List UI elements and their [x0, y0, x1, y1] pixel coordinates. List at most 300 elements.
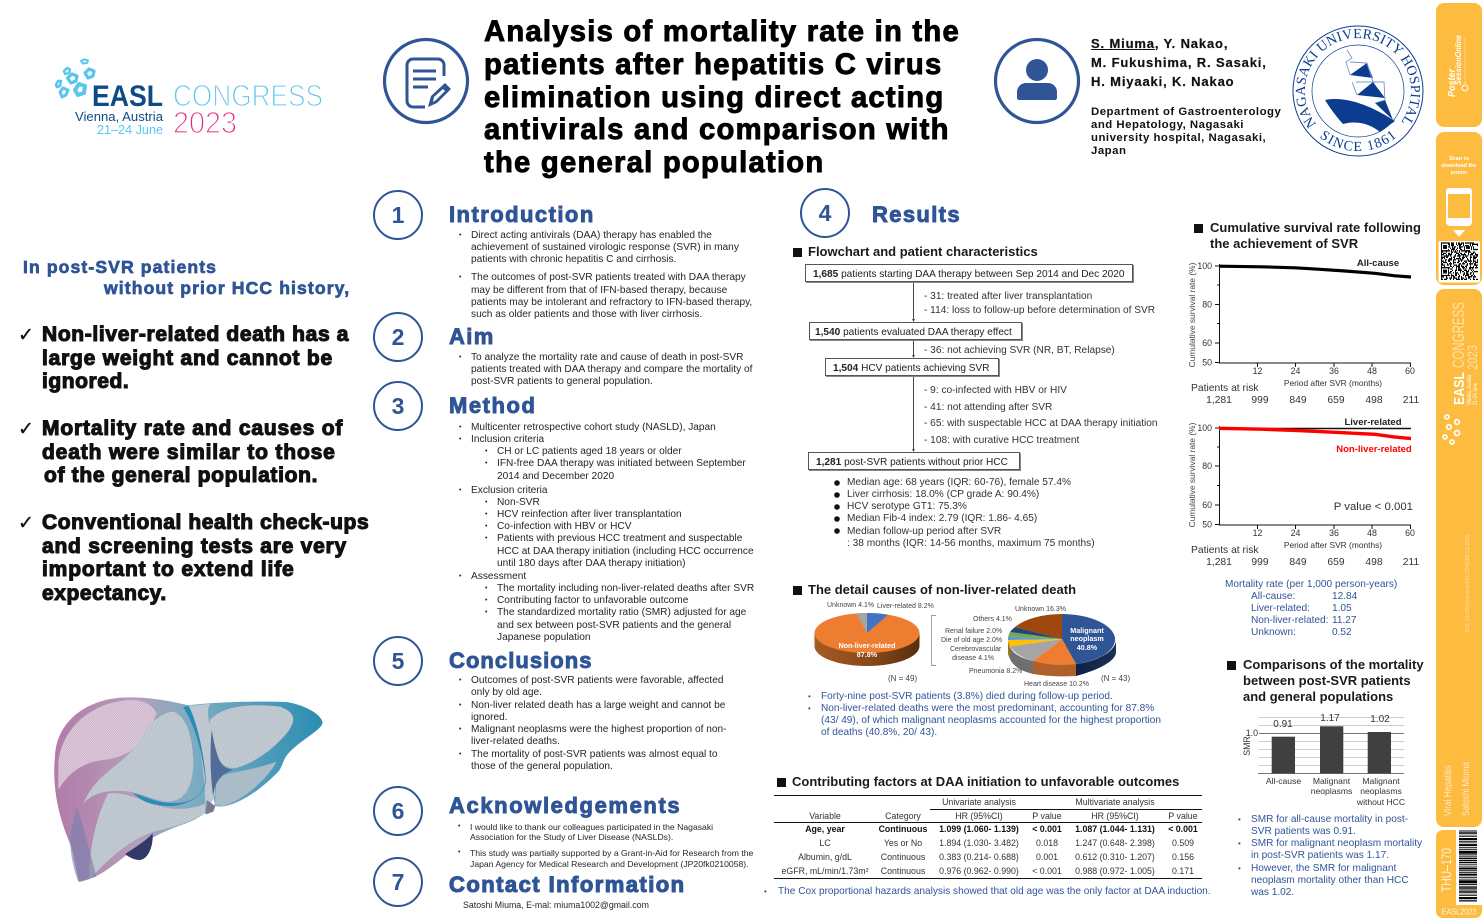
pie: all causes (N = 49): Non-liver-related [838, 641, 896, 650]
pie: non-liver-related causes (N = 43): Unknown 16.3% [1015, 606, 1066, 613]
pie: all causes (N = 49) [814, 602, 934, 683]
chart: all-cause survival: 12 [1253, 366, 1262, 376]
message 3: important to extend life [42, 558, 295, 581]
table: Cox analysis: LC [819, 838, 831, 848]
text: introduction: patients may be intolerant and refractory to IFN-based therapy, [471, 297, 752, 308]
sidebar [1436, 3, 1482, 918]
subheading: comparisons: Comparisons of the mortality [1243, 657, 1424, 672]
table: Cox analysis: Variable [809, 811, 841, 821]
pie: non-liver-related causes (N = 43): Others 4.1% [973, 616, 1012, 623]
chart: cause-specific survival: 60 [1202, 500, 1212, 510]
table: Cox analysis: P value [1032, 811, 1062, 821]
sidebar panel: abstract number and barcode [1436, 830, 1482, 918]
section number 4: 4 [819, 200, 831, 226]
chart: SMR bars: 1.0 [1246, 728, 1258, 738]
chart: cause-specific survival: 80 [1202, 461, 1212, 471]
chart: cause-specific survival [1187, 417, 1419, 568]
chart: SMR bars: 0.91 [1273, 719, 1293, 730]
sidebar panel: abstract number and barcode: EASL2023 [1442, 908, 1477, 916]
chart: all-cause survival: 36 [1329, 366, 1339, 376]
chart: cause-specific survival: Cumulative survival rate (%) [1187, 422, 1197, 527]
pie: non-liver-related causes (N = 43): Heart disease 10.2% [1024, 681, 1089, 688]
heading: Method: Method [449, 393, 537, 418]
section number 5 [373, 636, 423, 686]
text: SMR findings: However, the SMR for malignant [1251, 863, 1396, 874]
chart: cause-specific survival: 36 [1329, 528, 1339, 538]
subheading: detail causes: The detail causes of non-liver-related death [808, 582, 1076, 597]
text: pie findings: • [808, 704, 811, 713]
heading: Introduction: Introduction [449, 202, 595, 227]
chart: all-cause survival: All-cause [1357, 258, 1399, 269]
exclusions step 3: - 108: with curative HCC treatment [924, 435, 1079, 446]
table: Cox analysis: 0.509 [1172, 838, 1194, 848]
text: method: The standardized mortality ratio (SMR) adjusted for age [497, 607, 746, 618]
table: Cox analysis: P value [1168, 811, 1198, 821]
chart: cause-specific survival: 50 [1202, 520, 1212, 530]
affiliation [1091, 106, 1281, 157]
text: introduction [459, 230, 752, 320]
pie: all causes (N = 49): Unknown 4.1% [827, 602, 874, 609]
subheading: contributing factors: Contributing factors at DAA initiation to unfavorable outcomes [792, 774, 1179, 789]
text: Cox note: • [764, 887, 767, 896]
chart: all-cause survival: 60 [1405, 366, 1415, 376]
pie: non-liver-related causes (N = 43): 40.8% [1077, 643, 1098, 652]
chart: cause-specific survival: 211 [1403, 557, 1419, 568]
affiliation: university hospital, Nagasaki, [1091, 132, 1266, 144]
chart: cause-specific survival: Non-liver-related [1336, 444, 1412, 455]
patient characteristics: Liver cirrhosis: 18.0% (CP grade A: 90.4%) [847, 489, 1039, 500]
text: method: until 180 days after DAA therapy initiation) [497, 558, 686, 569]
text: SMR findings: SVR patients was 0.91. [1251, 826, 1356, 837]
bracket [932, 616, 936, 666]
text: aim: patients treated with DAA therapy and compare the mortality of [471, 364, 752, 375]
text: conclusions: Malignant neoplasms were the highest proportion of non- [471, 724, 727, 735]
title: the general population [484, 147, 824, 179]
pie: non-liver-related causes (N = 43): Die of old age 2.0% [941, 637, 1002, 644]
table: Cox analysis: HR (95%CI) [955, 811, 1003, 821]
chart: cause-specific survival: Patients at risk [1191, 545, 1259, 556]
text: contact: Satoshi Miuma, E-mal: miuma1002@gmail.com [463, 900, 649, 910]
text: pie findings: Non-liver-related deaths were the most predominant, accounting for 87.8% [821, 703, 1154, 714]
patient characteristics: Median age: 68 years (IQR: 60-76), female 57.4% [847, 477, 1071, 488]
message 1: ✓ [18, 324, 34, 346]
text: method: Non-SVR [497, 497, 540, 508]
table: Cox analysis: 1.894 (1.030- 3.482) [939, 838, 1019, 848]
text: SMR findings: neoplasm mortality other than HCC [1251, 875, 1409, 886]
chart: all-cause survival: 60 [1202, 338, 1212, 348]
pie: all causes (N = 49): (N = 49) [888, 674, 917, 683]
logo: Nagasaki University Hospital seal: SINCE 1861 [1320, 131, 1396, 151]
text: acknowledgements: This study was partially supported by a Grant-in-Aid for Research from the [470, 848, 753, 858]
pie: non-liver-related causes (N = 43): Renal failure 2.0% [945, 628, 1002, 635]
logo: EASL Congress 2023 [54, 58, 323, 140]
table: Cox analysis: 0.156 [1172, 852, 1194, 862]
text: pie findings: Forty-nine post-SVR patients (3.8%) died during follow-up period. [821, 691, 1113, 702]
table: Cox analysis: 1.099 (1.060- 1.139) [939, 824, 1019, 834]
chart: SMR bars: Malignant [1362, 776, 1400, 786]
title: Analysis of mortality rate in the [484, 16, 960, 48]
box: 1,281 [808, 452, 1020, 470]
chart: all-cause survival: Cumulative survival rate (%) [1187, 262, 1197, 367]
chart: all-cause survival: 1,281 [1206, 395, 1232, 406]
text: SMR findings: SMR for malignant neoplasm mortality [1251, 838, 1422, 849]
text: conclusions [459, 675, 727, 772]
text: SMR findings: • [1238, 839, 1241, 848]
text: method: Multicenter retrospective cohort study (NASLD), Japan [471, 422, 716, 433]
chart: all-cause survival: 48 [1367, 366, 1377, 376]
chart: cause-specific survival: 849 [1289, 557, 1307, 568]
chart: cause-specific survival: 1,281 [1206, 557, 1232, 568]
chart: all-cause survival: 50 [1202, 358, 1212, 368]
chart: SMR bars: 1.02 [1370, 714, 1390, 725]
sidebar panel: congress info: Vienna, Austria [1467, 375, 1473, 405]
section number 2 [373, 312, 423, 362]
text: conclusions: Outcomes of post-SVR patients were favorable, affected [471, 675, 724, 686]
sidebar panel: congress info: EASL [1451, 372, 1468, 405]
heading: Results: Results [872, 202, 961, 227]
text: acknowledgements: I would like to thank our colleagues participated in the Nagasaki [470, 822, 713, 832]
text: method: Japanese population [497, 632, 590, 643]
table: Cox analysis: 1.087 (1.044- 1.131) [1075, 824, 1155, 834]
authors [1091, 36, 1267, 89]
message 2 [18, 417, 343, 487]
text: mortality rates: Non-liver-related: [1251, 615, 1328, 626]
sidebar panel: QR code: download the [1441, 163, 1477, 169]
pie: non-liver-related causes (N = 43): disease 4.1% [952, 655, 994, 662]
text: method: IFN-free DAA therapy was initiated between September [497, 458, 746, 469]
text: introduction: such as older patients and those with liver cirrhosis. [471, 309, 702, 320]
chart: SMR bars: neoplasms [1360, 786, 1402, 796]
table: Cox analysis: 0.001 [1036, 852, 1058, 862]
exclusions step 3: - 9: co-infected with HBV or HIV [924, 385, 1067, 396]
text: acknowledgements [458, 822, 753, 869]
message 1: large weight and cannot be [42, 347, 333, 370]
chart: all-cause survival: Period after SVR (months) [1284, 378, 1382, 388]
message 3 [18, 511, 369, 605]
message 3: ✓ [18, 512, 34, 534]
title: patients after hepatitis C virus [484, 49, 942, 81]
chart: cause-specific survival: 659 [1327, 557, 1345, 568]
text: introduction: achievement of sustained virologic response (SVR) in many [471, 242, 739, 253]
panel: left key messages [18, 257, 369, 605]
table: Cox analysis: 0.612 (0.310- 1.207) [1075, 852, 1155, 862]
logo: EASL Congress 2023: 21–24 June [97, 123, 163, 137]
message 3: expectancy. [42, 582, 167, 605]
sidebar panel: congress info: CONGRESS [1450, 302, 1468, 368]
text: mortality rates: 0.52 [1332, 627, 1352, 638]
logo: EASL Congress 2023: EASL [92, 80, 163, 113]
heading: Conclusions: Conclusions [449, 648, 593, 673]
chart: cause-specific survival: 12 [1253, 528, 1262, 538]
text: mortality rates [1225, 579, 1397, 638]
message 1: Non-liver-related death has a [42, 323, 349, 346]
chart: all-cause survival: Patients at risk [1191, 383, 1259, 394]
chart: all-cause survival: 498 [1365, 395, 1383, 406]
text: Cox note: The Cox proportional hazards analysis showed that old age was the only factor at DAA induction. [778, 886, 1211, 897]
text: method [459, 422, 754, 643]
sidebar panel: congress info: 2023 [1464, 345, 1480, 370]
sidebar panel: Poster Session Online: Poster [1447, 68, 1458, 97]
icon: person [994, 38, 1080, 124]
box: 1,540 [809, 322, 1022, 340]
lead-in statement: without prior HCC history, [104, 278, 350, 298]
affiliation: and Hepatology, Nagasaki [1091, 119, 1244, 131]
text: introduction: may be different from that of IFN-based therapy, because [471, 285, 727, 296]
exclusions step 1: - 114: loss to follow-up before determination of SVR [924, 305, 1155, 316]
table: Cox analysis: HR (95%CI) [1091, 811, 1139, 821]
section number 2: 2 [392, 324, 404, 350]
text: method: Co-infection with HBV or HCV [497, 521, 631, 532]
table: Cox analysis: < 0.001 [1032, 824, 1062, 834]
box: 1,685 [805, 264, 1133, 282]
lead-in statement: In post-SVR patients [23, 257, 217, 277]
table: Cox analysis: 1.247 (0.648- 2.398) [1075, 838, 1155, 848]
pie: non-liver-related causes (N = 43): Malignant [1070, 626, 1104, 635]
affiliation: Japan [1091, 145, 1126, 157]
table: Cox analysis [774, 795, 1202, 879]
text: pie findings [808, 691, 1161, 738]
subheading: comparisons: and general populations [1243, 689, 1393, 704]
message 3: and screening tests are very [42, 535, 347, 558]
subheading: cumulative survival [1194, 220, 1421, 251]
authors: S. Miuma, Y. Nakao, [1091, 36, 1228, 51]
box: 1,540: 1,540 patients evaluated DAA therapy effect [815, 327, 1012, 338]
pie: all causes (N = 49): Liver-related 8.2% [877, 603, 934, 610]
text: mortality rates: 11.27 [1332, 615, 1357, 626]
section number 7: 7 [392, 869, 404, 895]
text: method: Assessment [471, 571, 526, 582]
patient characteristics: HCV serotype GT1: 75.3% [847, 501, 967, 512]
sidebar panel: congress info: Satoshi Miuma [1460, 762, 1472, 816]
title: elimination using direct acting [484, 82, 944, 114]
chart: cause-specific survival: Period after SVR (months) [1284, 540, 1382, 550]
text: introduction: patients with chronic hepatitis C and cirrhosis. [471, 254, 676, 265]
text: introduction: Direct acting antivirals (DAA) therapy has enabled the [471, 230, 712, 241]
box: 1,504: 1,504 HCV patients achieving SVR [833, 363, 990, 374]
text: conclusions: liver-related deaths. [471, 736, 560, 747]
chart: SMR bars [1242, 713, 1405, 807]
box: 1,281: 1,281 post-SVR patients without prior HCC [816, 457, 1008, 468]
section number 4 [800, 188, 850, 238]
sidebar panel: congress info: Viral Hepatitis [1442, 765, 1454, 816]
message 1: ignored. [42, 370, 129, 393]
chart: all-cause survival: 849 [1289, 395, 1307, 406]
chart: SMR bars: Malignant [1313, 776, 1351, 786]
text: aim: post-SVR patients to general population. [471, 376, 653, 387]
text: aim [459, 352, 752, 387]
box: 1,685: 1,685 patients starting DAA therapy between Sep 2014 and Dec 2020 [813, 269, 1124, 280]
sidebar panel: congress info: 21–24 June [1473, 383, 1479, 405]
chart: all-cause survival: 24 [1291, 366, 1300, 376]
message 1 [18, 323, 350, 393]
table: Cox analysis: Continuous [879, 824, 928, 834]
heading: Acknowledgements: Acknowledgements [449, 793, 681, 818]
chart: cause-specific survival: Liver-related [1344, 417, 1402, 428]
exclusions step 1 [924, 291, 1155, 316]
text: mortality rates: 1.05 [1332, 603, 1352, 614]
text: SMR findings: in post-SVR patients was 1.17. [1251, 850, 1389, 861]
chart: SMR bars: 1.17 [1320, 713, 1340, 724]
chart: SMR bars: All-cause [1266, 776, 1301, 786]
sidebar panel: Poster Session Online [1436, 3, 1482, 127]
pie charts [814, 602, 1130, 688]
text: method: Inclusion criteria [471, 434, 544, 445]
table: Cox analysis: 0.383 (0.214- 0.688) [939, 852, 1019, 862]
text: SMR findings: was 1.02. [1251, 887, 1294, 898]
table: Cox analysis: < 0.001 [1168, 824, 1198, 834]
icon: document with pencil [382, 38, 470, 124]
sidebar panel: congress info [1436, 289, 1482, 827]
sidebar panel: congress info: DOI: 10.3252/pro.eu.EASLCONGRESS.2023 [1465, 535, 1471, 632]
table: Cox analysis: Albumin, g/dL [798, 852, 852, 862]
text: method: CH or LC patients aged 18 years or older [497, 446, 682, 457]
table: Cox analysis: Continuous [881, 866, 926, 876]
text: aim: To analyze the mortality rate and cause of death in post-SVR [471, 352, 743, 363]
text: conclusions: only by old age. [471, 687, 542, 698]
chart: all-cause survival: 999 [1251, 395, 1269, 406]
message 2: Mortality rate and causes of [42, 417, 343, 440]
text: method: Patients with previous HCC treatment and suspectable [497, 533, 742, 544]
text: method: and sex between post-SVR patients and the general [497, 620, 731, 630]
table: Cox analysis: eGFR, mL/min/1.73m² [781, 866, 869, 876]
sidebar panel: QR code: poster [1451, 170, 1468, 176]
text: method: 2014 and December 2020 [497, 471, 614, 482]
chart: all-cause survival [1187, 258, 1419, 406]
chart: cause-specific survival: 999 [1251, 557, 1269, 568]
exclusions step 3: - 41: not attending after SVR [924, 402, 1052, 413]
subheading: comparisons: between post-SVR patients [1243, 673, 1411, 688]
chart: all-cause survival: 659 [1327, 395, 1345, 406]
text: method: HCV reinfection after liver transplantation [497, 509, 682, 520]
table: Cox analysis: 0.018 [1036, 838, 1058, 848]
subheading: cumulative survival: the achievement of SVR [1210, 236, 1358, 251]
section number 3 [373, 381, 423, 431]
heading: Contact Information: Contact Information [449, 872, 686, 897]
illustration: liver [54, 697, 323, 882]
text: conclusions: Non-liver related death has a large weight and cannot be [471, 700, 725, 711]
sidebar panel: QR code [1436, 132, 1482, 285]
chart: cause-specific survival: 24 [1291, 528, 1300, 538]
text: conclusions: those of the general population. [471, 761, 613, 772]
chart: cause-specific survival: 48 [1367, 528, 1377, 538]
subheading: comparisons [1227, 657, 1424, 704]
table: Cox analysis: Univariate analysis [942, 797, 1017, 807]
section number 6: 6 [392, 798, 404, 824]
text: SMR findings [1238, 814, 1422, 898]
chart: all-cause survival: 100 [1197, 261, 1212, 271]
table: Cox analysis: 0.171 [1172, 866, 1194, 876]
text: mortality rates: Liver-related: [1251, 603, 1310, 614]
lead-in statement [23, 257, 350, 298]
pie: non-liver-related causes (N = 43): Cerebrovascular [950, 646, 1002, 653]
chart: cause-specific survival: 498 [1365, 557, 1383, 568]
affiliation: Department of Gastroenterology [1091, 106, 1281, 118]
text: conclusions: ignored. [471, 712, 508, 723]
chart: cause-specific survival: 100 [1197, 423, 1212, 433]
pie: non-liver-related causes (N = 43): Pneumonia 8.2% [969, 668, 1022, 675]
text: method: Exclusion criteria [471, 485, 548, 496]
sidebar panel: abstract number and barcode: THU–170 [1439, 848, 1454, 892]
exclusions step 1: - 31: treated after liver transplantation [924, 291, 1092, 302]
message 2: ✓ [18, 418, 34, 440]
authors: M. Fukushima, R. Sasaki, [1091, 55, 1267, 70]
text: mortality rates: All-cause: [1251, 591, 1295, 602]
section number 6 [373, 786, 423, 836]
table: Cox analysis: < 0.001 [1032, 866, 1062, 876]
logo: Nagasaki University Hospital seal: NAGASAKI UNIVERSITY HOSPITAL [1296, 28, 1420, 129]
exclusions step 2: - 36: not achieving SVR (NR, BT, Relapse) [924, 345, 1115, 356]
chart: cause-specific survival: 60 [1405, 528, 1415, 538]
pie: all causes (N = 49): 87.8% [857, 650, 878, 659]
text: method: The mortality including non-liver-related deaths after SVR [497, 583, 754, 594]
patient characteristics: Median Fib-4 index: 2.79 (IQR: 1.86- 4.65) [847, 513, 1037, 524]
text: SMR findings: • [1238, 864, 1241, 873]
patient characteristics: Median follow-up period after SVR [847, 526, 1001, 537]
table: Cox analysis: Yes or No [884, 838, 922, 848]
flowchart [805, 264, 1158, 471]
pie: non-liver-related causes (N = 43): (N = 43) [1101, 674, 1130, 683]
logo: EASL Congress 2023: 2023 [173, 105, 237, 140]
table: Cox analysis: Category [885, 811, 921, 821]
text: method: HCC at DAA therapy initiation (including HCC occurrence [497, 546, 754, 557]
text: acknowledgements: Association for the Study of Liver Disease (NASLDs). [470, 832, 673, 842]
chart: SMR bars: without HCC [1356, 797, 1405, 807]
pie: non-liver-related causes (N = 43): neoplasm [1070, 634, 1104, 643]
section number 1 [373, 190, 423, 240]
authors: H. Miyaaki, K. Nakao [1091, 74, 1234, 89]
chart: cause-specific survival: P value < 0.001 [1334, 501, 1413, 513]
table: Cox analysis: Age, year [805, 824, 845, 834]
text: pie findings: of deaths (40.8%, 20/ 43). [821, 727, 937, 738]
text: mortality rates: Unknown: [1251, 627, 1296, 638]
box: 1,504 [825, 358, 999, 376]
message 2: death were similar to those [42, 441, 336, 464]
sidebar panel: Poster Session Online: SessionOnline [1453, 35, 1463, 85]
chart: all-cause survival: 80 [1202, 300, 1212, 310]
section number 5: 5 [392, 648, 404, 674]
table: Cox analysis: Multivariate analysis [1075, 797, 1155, 807]
heading: Aim: Aim [449, 324, 495, 349]
title: antivirals and comparison with [484, 114, 950, 146]
message 2: of the general population. [44, 464, 318, 487]
chart: all-cause survival: 211 [1403, 395, 1419, 406]
pie: non-liver-related causes (N = 43) [941, 606, 1130, 688]
subheading: flowchart: Flowchart and patient characteristics [808, 244, 1038, 259]
text: mortality rates: 12.84 [1332, 591, 1357, 602]
text: SMR findings: • [1238, 815, 1241, 824]
chart: SMR bars: SMR [1242, 736, 1252, 756]
table: Cox analysis: 0.988 (0.972- 1.005) [1075, 866, 1155, 876]
section number 3: 3 [392, 393, 404, 419]
title [484, 16, 960, 179]
text: mortality rates: Mortality rate (per 1,000 person-years) [1225, 579, 1397, 590]
patient characteristics [834, 477, 1095, 549]
subheading: cumulative survival: Cumulative survival rate following [1210, 220, 1421, 235]
text: introduction: The outcomes of post-SVR patients treated with DAA therapy [471, 272, 746, 283]
logo: EASL Congress 2023: Vienna, Austria [75, 110, 163, 124]
section number 1: 1 [392, 202, 404, 228]
text: method: Contributing factor to unfavorable outcome [497, 595, 688, 606]
exclusions step 3: - 65: with suspectable HCC at DAA therapy initiation [924, 418, 1158, 429]
table: Cox analysis: 0.976 (0.962- 0.990) [939, 866, 1019, 876]
text: pie findings: (43/ 49), of which malignant neoplasms accounted for the highest proportion [821, 715, 1161, 726]
text: SMR findings: SMR for all-cause mortality in post- [1251, 814, 1408, 825]
sidebar panel: QR code: Scan to [1449, 156, 1470, 162]
section number 7 [373, 857, 423, 907]
text: conclusions: The mortality of post-SVR patients was almost equal to [471, 749, 718, 760]
message 3: Conventional health check-ups [42, 511, 369, 534]
patient characteristics: : 38 months (IQR: 14-56 months, maximum 75 months) [847, 538, 1095, 549]
